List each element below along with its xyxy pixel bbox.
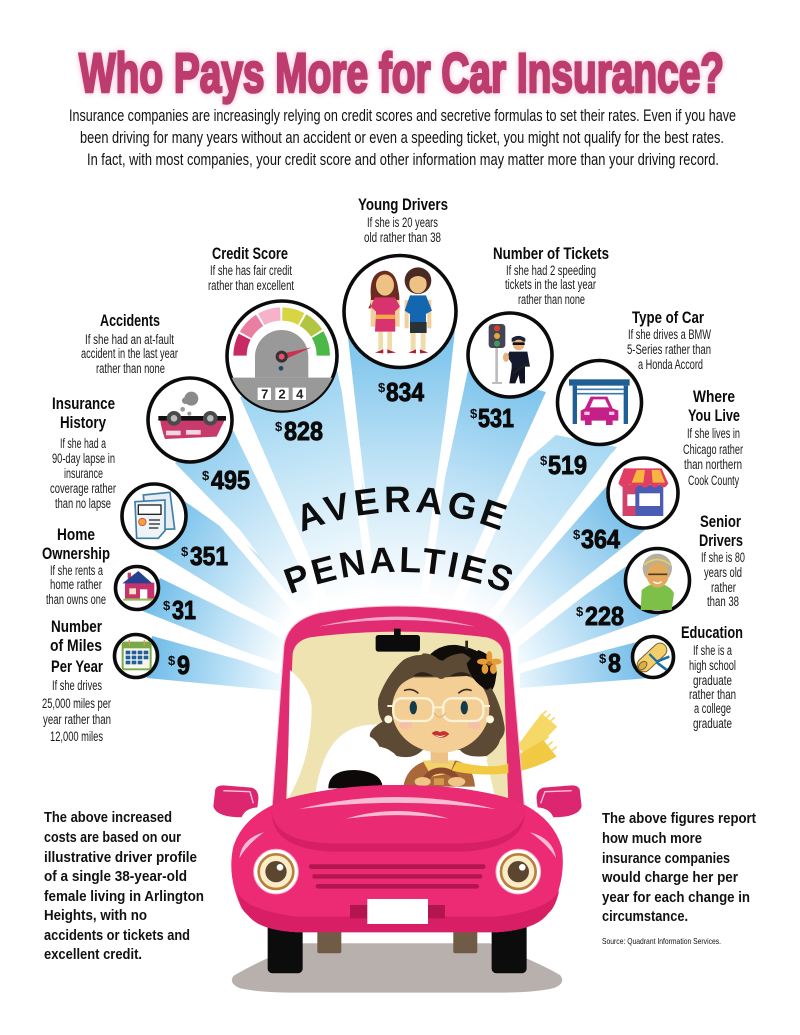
licence plate	[350, 899, 445, 924]
panel: where you live: You Live	[688, 406, 740, 425]
amounts: 351	[190, 541, 228, 571]
amounts: $	[202, 468, 210, 483]
amounts: 531	[478, 403, 514, 433]
panel: education: Education	[681, 623, 743, 642]
note: left: illustrative driver profile	[44, 849, 197, 866]
panel: number of miles per year: Number	[51, 617, 102, 636]
panel: number of tickets: rather than none	[518, 292, 585, 307]
panel: senior drivers: Senior	[700, 512, 741, 531]
head rest	[328, 770, 383, 788]
panel: type of car: 5-Series rather than	[627, 342, 711, 357]
panel: young drivers: Young Drivers	[358, 195, 448, 214]
note: right: circumstance.	[602, 908, 688, 925]
panel: senior drivers: Drivers	[699, 531, 743, 550]
amounts: 364	[581, 524, 620, 554]
panel: insurance history: If she had a	[60, 436, 106, 451]
amounts: 228	[585, 601, 624, 631]
intro text	[69, 106, 736, 169]
panel: number of tickets: If she had 2 speeding	[506, 263, 596, 278]
wheels	[268, 917, 527, 973]
heading: average penalties: PENALTIES	[284, 547, 512, 594]
scarf end	[457, 711, 557, 773]
panel: number of miles per year: of Miles	[50, 636, 102, 655]
panel: credit score: rather than excellent	[208, 278, 294, 293]
panel: number of miles per year: Per Year	[51, 657, 103, 676]
panel: credit score: Credit Score	[212, 244, 288, 263]
panel: where you live: Chicago rather	[683, 442, 743, 457]
panel: senior drivers	[626, 512, 745, 612]
amounts	[163, 377, 624, 680]
amounts: $	[378, 380, 386, 395]
panel: number of miles per year: 25,000 miles per	[42, 696, 111, 711]
panel: accidents: rather than none	[96, 361, 165, 376]
note: left: excellent credit.	[44, 946, 142, 963]
amounts: 495	[211, 465, 250, 495]
note: left: of a single 38-year-old	[44, 868, 187, 885]
heading: average penalties	[284, 486, 512, 594]
amounts: $	[540, 453, 548, 468]
amounts: $	[599, 651, 607, 666]
panel: young drivers	[344, 195, 456, 368]
note: right: how much more	[602, 830, 702, 847]
note: right: would charge her per	[601, 869, 738, 886]
panel: insurance history: Insurance	[52, 394, 115, 413]
amounts: 834	[386, 377, 424, 407]
windshield	[286, 632, 508, 803]
panel: number of miles per year: If she drives	[52, 678, 102, 693]
note: left	[44, 809, 204, 963]
panel: type of car	[558, 308, 711, 444]
note: left: Heights, with no	[44, 907, 147, 924]
amounts: $	[181, 544, 189, 559]
source note: Source: Quadrant Information Services.	[602, 936, 721, 946]
panel: education	[632, 623, 743, 731]
amounts: 519	[548, 450, 587, 480]
panel: home ownership: If she rents a	[50, 563, 103, 578]
note: right: year for each change in	[602, 889, 750, 906]
panel: young drivers: old rather than 38	[364, 230, 441, 245]
panel: type of car: a Honda Accord	[638, 357, 703, 372]
panel: where you live	[608, 387, 743, 528]
amounts: 828	[284, 416, 323, 446]
panel: where you live: If she lives in	[687, 426, 740, 441]
amounts: $	[573, 527, 581, 542]
heading: average penalties: AVERAGE	[302, 486, 507, 532]
note: left: costs are based on our	[44, 829, 181, 846]
panel: type of car: If she drives a BMW	[628, 327, 711, 342]
panel: number of tickets: Number of Tickets	[493, 244, 609, 263]
hood	[271, 785, 525, 852]
driver	[370, 641, 508, 787]
grille	[309, 864, 486, 889]
panel: education: If she is a	[693, 643, 732, 658]
panel: number of miles per year	[42, 617, 158, 744]
note: left: The above increased	[44, 809, 172, 826]
panel: accidents: accident in the last year	[81, 346, 178, 361]
car body	[231, 792, 563, 932]
panel: insurance history: 90-day lapse in	[52, 451, 115, 466]
panel: education: a college	[694, 701, 731, 716]
note: right: insurance companies	[602, 850, 730, 867]
panel: insurance history: insurance	[64, 466, 103, 481]
panel: education: graduate	[693, 673, 732, 688]
roof highlight	[318, 617, 475, 627]
panel: insurance history	[50, 394, 186, 548]
panel: credit score	[208, 244, 337, 411]
panel: home ownership	[42, 525, 158, 610]
panel: senior drivers: than 38	[707, 594, 739, 609]
note: right: The above figures report	[602, 810, 756, 827]
panel: credit score: 7	[261, 386, 268, 402]
panel: senior drivers: years old	[704, 565, 742, 580]
panel: home ownership: than owns one	[46, 592, 106, 607]
panel: credit score: 2	[278, 386, 286, 402]
amounts: $	[163, 598, 171, 613]
panel: education: high school	[689, 658, 736, 673]
side highlights	[239, 832, 556, 858]
panel: home ownership: home rather	[50, 577, 102, 592]
note: right	[601, 810, 756, 925]
panel: accidents	[81, 311, 232, 462]
panel: type of car: Type of Car	[632, 308, 704, 327]
amounts: $	[470, 406, 478, 421]
note: left: female living in Arlington	[44, 888, 204, 905]
panel: number of miles per year: year rather than	[43, 712, 111, 727]
panel: insurance history: coverage rather	[50, 481, 116, 496]
rear-view mirror	[376, 629, 420, 652]
panel: senior drivers: If she is 80	[701, 550, 745, 565]
headlights	[254, 849, 541, 894]
note: left: accidents or tickets and	[44, 927, 190, 944]
side mirrors	[213, 785, 582, 817]
panel: education: graduate	[693, 716, 732, 731]
panel: accidents: If she had an at-fault	[85, 332, 174, 347]
panel: number of miles per year: 12,000 miles	[50, 729, 103, 744]
panel: senior drivers: rather	[711, 580, 736, 595]
illustration: pink car with driver	[213, 606, 582, 993]
panel: accidents: Accidents	[100, 311, 160, 330]
panel: insurance history: History	[60, 413, 106, 432]
panel: number of tickets	[468, 244, 609, 397]
blue rays	[140, 330, 660, 691]
amounts: 31	[172, 595, 196, 625]
panel: home ownership: Ownership	[42, 544, 110, 563]
panel: where you live: than northern	[684, 457, 742, 472]
amounts: $	[168, 653, 176, 668]
panel: where you live: Cook County	[688, 473, 739, 488]
panel: home ownership: Home	[57, 525, 95, 544]
ground shadow	[232, 943, 562, 993]
amounts: 8	[608, 648, 621, 678]
panel: young drivers: If she is 20 years	[367, 215, 438, 230]
panel: education: rather than	[689, 687, 736, 702]
amounts: 9	[177, 650, 190, 680]
amounts: $	[576, 604, 584, 619]
panel: insurance history: than no lapse	[55, 496, 111, 511]
panel: credit score: If she has fair credit	[210, 263, 292, 278]
panel: where you live: Where	[693, 387, 735, 406]
amounts: $	[275, 419, 283, 434]
panel: credit score: 4	[296, 386, 304, 402]
panel: number of tickets: tickets in the last year	[505, 277, 596, 292]
car roof frame	[272, 606, 525, 813]
